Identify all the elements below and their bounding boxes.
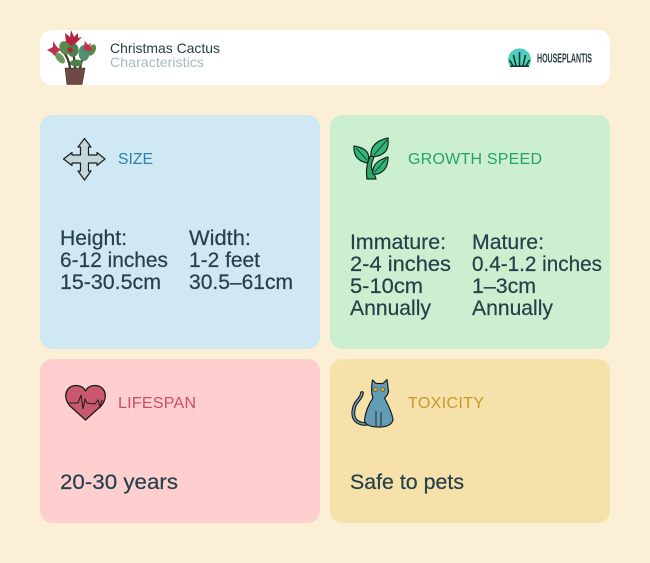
panel: toxicity [330, 359, 610, 523]
text: immature [350, 231, 451, 320]
text: mature: 0.4-1.2 inches [472, 253, 602, 276]
text: width: 30.5–61cm [189, 271, 293, 294]
text: height: 15-30.5cm [60, 271, 161, 294]
text: mature: Mature: [472, 231, 544, 254]
text: immature: 5-10cm [350, 275, 423, 298]
text: width [189, 227, 293, 294]
heading: growth speed: GROWTH SPEED [408, 151, 542, 168]
icon: sprout leaves [354, 138, 388, 179]
text: 20-30 years: 20-30 years [60, 471, 178, 494]
panel: lifespan [40, 359, 320, 523]
text: mature [472, 231, 602, 320]
icon: sitting cat [353, 380, 393, 427]
logo: Houseplantis: HOUSEPLANTIS [537, 52, 592, 66]
heading: Christmas Cactus: Christmas Cactus [110, 40, 220, 56]
icon: four-way arrows [64, 138, 105, 180]
panel: growth speed [330, 115, 610, 349]
header bar [40, 30, 610, 85]
text: immature: 2-4 inches [350, 253, 451, 276]
text: width: 1-2 feet [189, 249, 260, 272]
text: immature: Annually [350, 297, 431, 320]
icon: heart with pulse [66, 386, 105, 420]
text: safe to pets: Safe to pets [350, 471, 464, 494]
icon: potted cactus [47, 30, 98, 84]
subheading: Characteristics: Characteristics [110, 54, 204, 70]
text: height: Height: [60, 227, 127, 250]
panel: size [40, 115, 320, 349]
text: height [60, 227, 168, 294]
logo: Houseplantis [508, 48, 592, 67]
heading: size: SIZE [118, 151, 153, 168]
heading: lifespan: LIFESPAN [118, 395, 196, 412]
text: mature: Annually [472, 297, 553, 320]
text: width: Width: [189, 227, 251, 250]
text: immature: Immature: [350, 231, 446, 254]
text: height: 6-12 inches [60, 249, 168, 272]
text: mature: 1–3cm [472, 275, 536, 298]
heading: toxicity: TOXICITY [408, 395, 484, 412]
